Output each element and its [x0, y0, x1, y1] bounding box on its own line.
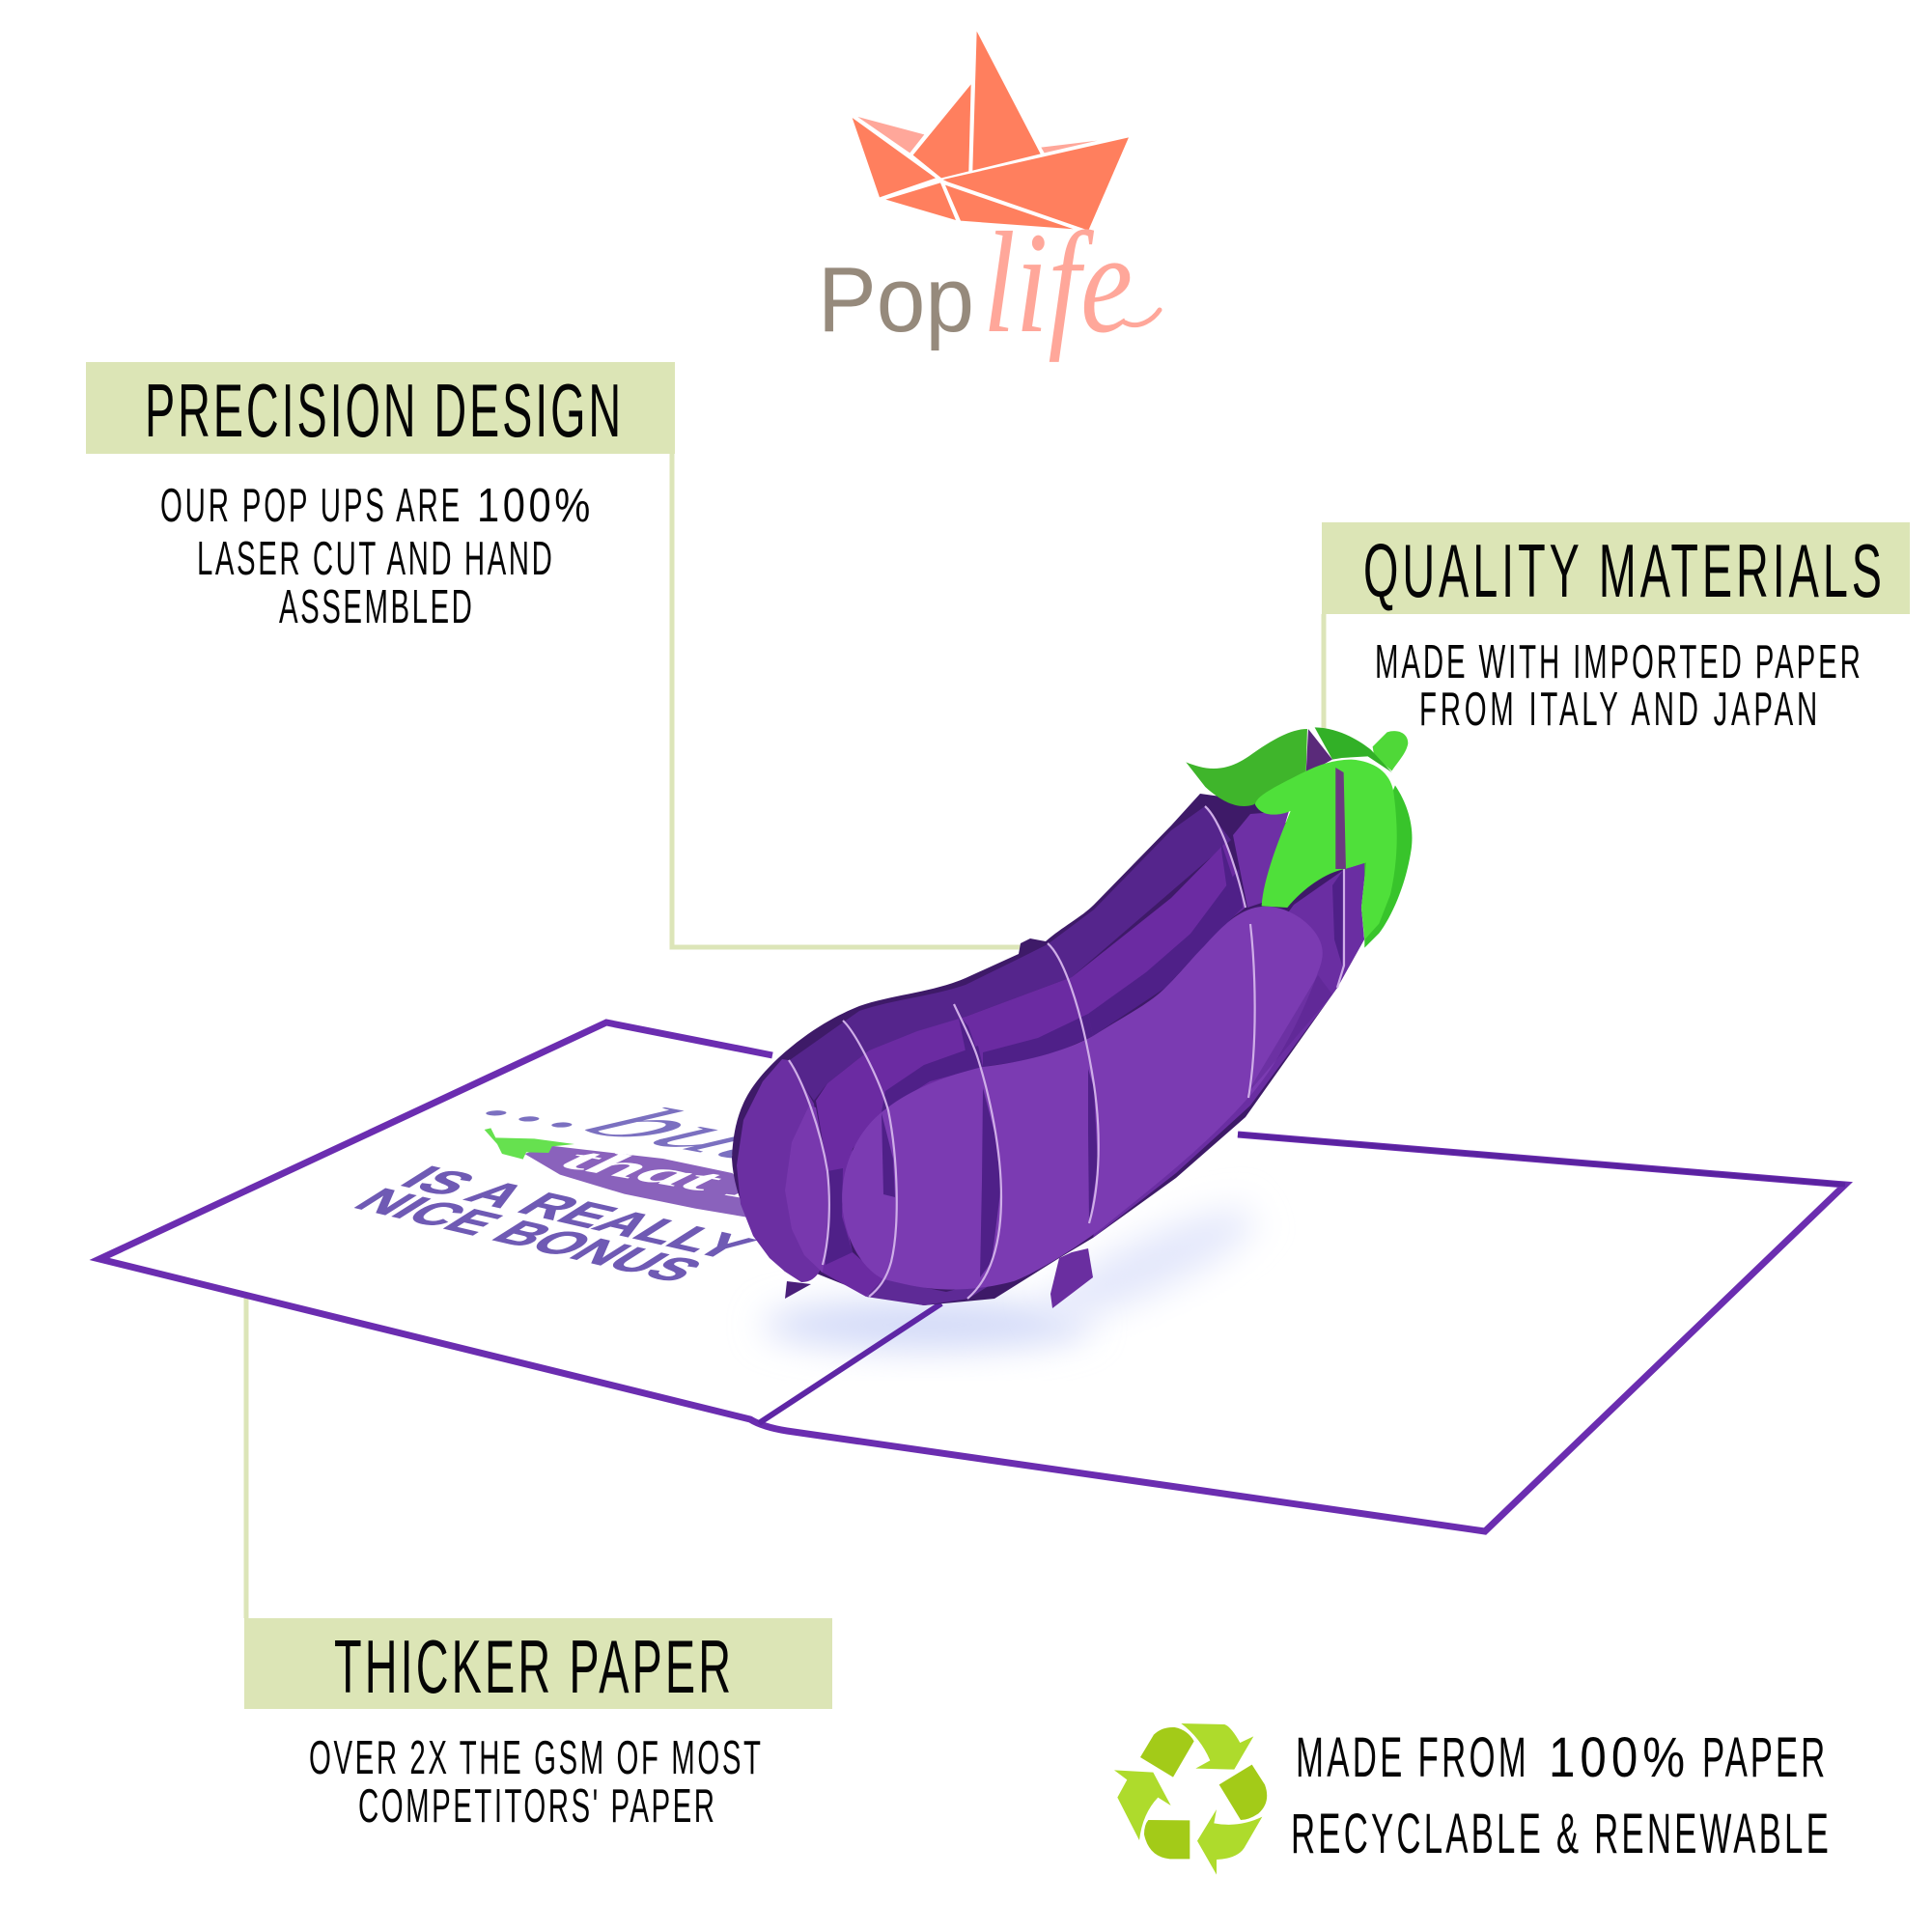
leaf fold [1335, 768, 1346, 869]
eggplant dark silhouette [732, 794, 1364, 1305]
mini eggplant illustration [485, 1128, 746, 1218]
purple notch between leaves [1306, 729, 1332, 774]
second petal [785, 1106, 828, 1273]
card base [99, 1022, 1845, 1531]
side leaf [1364, 785, 1412, 948]
text block: recycling claim: 100% [1549, 1726, 1685, 1789]
message: is a really: IS A REALLY [388, 1160, 768, 1266]
message: that: that D [550, 1142, 822, 1213]
rib edge lines [789, 806, 1344, 1299]
text block: precision design description: 100% [477, 479, 590, 532]
left petal [737, 1059, 827, 1282]
heading band: thicker paper [244, 1618, 832, 1709]
underside [866, 1276, 1004, 1305]
middle band [816, 842, 1246, 1297]
connector line: thicker paper [243, 1296, 249, 1618]
back right leaf [1315, 727, 1392, 772]
logo flourish [1125, 310, 1160, 325]
text block: recycling claim [1291, 1726, 1829, 1865]
heading band: precision design: PRECISION DESIGN [145, 369, 621, 453]
heading band: quality materials: QUALITY MATERIALS [1363, 529, 1882, 613]
middle band shading [826, 843, 1243, 1265]
connector line: precision design [672, 453, 1023, 947]
left foot tab [785, 1281, 811, 1299]
text block: precision design description: ASSEMBLED [279, 579, 472, 633]
icon: origami paper boat [853, 31, 1129, 231]
message: nice bonus: NICE BONUS [342, 1182, 715, 1289]
back band [787, 806, 1231, 1101]
logo: Poplife [818, 31, 1160, 363]
front panel [842, 907, 1323, 1290]
right body panels [1093, 862, 1366, 1238]
text block: recycling claim: RECYCLABLE & RENEWABLE [1291, 1804, 1829, 1865]
rib shadows [882, 869, 1344, 1277]
back leaf [1186, 729, 1307, 806]
callout: made from 100% paper [1114, 1723, 1829, 1875]
text block: thicker paper description: OVER 2X THE GSM OF MOST [309, 1730, 761, 1784]
message: but: ...but [453, 1080, 846, 1168]
text block: thicker paper description: COMPETITORS' PAPER [358, 1778, 714, 1833]
pop-up card with eggplant [99, 727, 1845, 1531]
panel: thicker paper [244, 1618, 832, 1833]
text block: quality materials description: MADE WITH IMPORTED PAPER [1375, 634, 1861, 688]
text block: precision design description [160, 478, 590, 633]
text block: thicker paper description [309, 1730, 761, 1833]
foot [1050, 1248, 1093, 1308]
eggplant pop-up [732, 727, 1412, 1308]
text block: recycling claim: PAPER [1702, 1727, 1825, 1789]
logo word: Pop: Pop [818, 248, 974, 351]
panel: precision design [86, 362, 675, 633]
text block: precision design description: OUR POP UPS ARE [160, 478, 460, 532]
logo word: life: life [983, 203, 1133, 363]
text block: precision design description: LASER CUT AND HAND [197, 531, 552, 585]
panel: quality materials [1322, 522, 1910, 736]
text block: quality materials description [1375, 634, 1861, 736]
connector line: quality materials [1321, 614, 1327, 734]
stem [1373, 731, 1408, 770]
leaves and stem [1186, 727, 1412, 948]
text block: recycling claim: MADE FROM [1296, 1727, 1526, 1789]
card message [342, 1080, 846, 1289]
heading band: thicker paper: THICKER PAPER [334, 1625, 731, 1709]
icon: recycling symbol [1114, 1723, 1267, 1875]
text block: quality materials description: FROM ITALY AND JAPAN [1419, 682, 1817, 736]
front leaf [1255, 760, 1397, 939]
